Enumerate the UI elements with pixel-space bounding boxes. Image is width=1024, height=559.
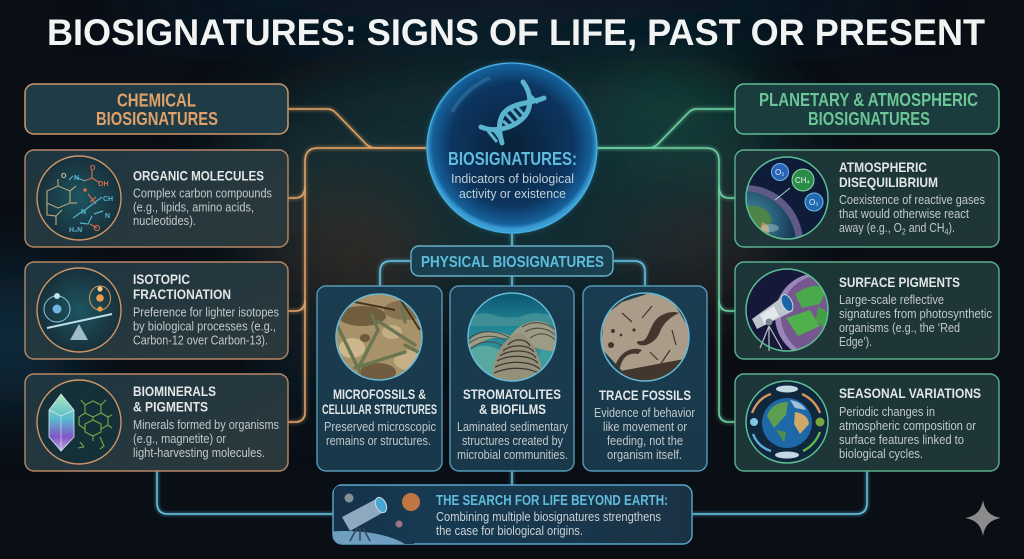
panel: surface pigments bbox=[735, 262, 999, 359]
orb text: Indicators of biological bbox=[451, 172, 574, 186]
panel: physical heading bbox=[411, 246, 613, 276]
panel: stromatolites bbox=[450, 286, 574, 471]
panel: chemical heading bbox=[25, 84, 288, 134]
icon: crystal and pigment molecule bbox=[37, 380, 121, 464]
panel: planetary heading bbox=[735, 84, 999, 134]
central orb bbox=[427, 63, 597, 233]
card text: by biological processes (e.g., bbox=[133, 320, 276, 334]
card heading: & BIOFILMS bbox=[479, 401, 546, 417]
icon: molecule: H₂N bbox=[69, 227, 82, 234]
icon: molecule: N bbox=[81, 209, 86, 216]
icon: molecule: OH bbox=[98, 181, 108, 188]
card heading bbox=[463, 386, 561, 417]
panel: chemical heading: CHEMICAL bbox=[117, 90, 196, 110]
card heading: & PIGMENTS bbox=[133, 398, 208, 414]
card text: Preference for lighter isotopes bbox=[133, 306, 279, 320]
card heading: FRACTIONATION bbox=[133, 286, 231, 302]
icon: earth with seasonal cycle bbox=[746, 381, 828, 463]
card heading: MICROFOSSILS & bbox=[333, 386, 426, 402]
connectors: physical and bottom bbox=[157, 232, 867, 514]
icon: sparkle watermark bbox=[965, 500, 1001, 536]
icon: DNA helix bbox=[481, 82, 544, 143]
card heading: ISOTOPIC bbox=[133, 271, 190, 287]
panel: the search for life beyond earth bbox=[332, 484, 693, 545]
card text: away (e.g., O bbox=[839, 221, 913, 235]
icon: earth with gas molecules bbox=[745, 156, 829, 240]
icon: molecule: N bbox=[105, 213, 110, 220]
card heading: CELLULAR STRUCTURES bbox=[322, 401, 437, 417]
card heading: STROMATOLITES bbox=[463, 386, 561, 402]
card text bbox=[594, 406, 695, 462]
panel: trace fossils bbox=[583, 286, 707, 471]
card text: Laminated sedimentary bbox=[457, 420, 569, 434]
card text: Large-scale reflective bbox=[839, 293, 944, 307]
icon: molecule: CH bbox=[103, 196, 113, 203]
card text: 4 bbox=[945, 226, 949, 236]
icon: layered stromatolite mounds bbox=[468, 293, 558, 382]
card text: Preserved microscopic bbox=[324, 420, 436, 434]
orb heading: BIOSIGNATURES: bbox=[448, 149, 577, 169]
card text: Periodic changes in bbox=[839, 405, 935, 419]
card heading: ATMOSPHERIC bbox=[839, 159, 927, 175]
panel: biominerals and pigments bbox=[25, 374, 288, 471]
card text: Complex carbon compounds bbox=[133, 186, 272, 200]
panel: planetary heading: BIOSIGNATURES bbox=[808, 109, 930, 129]
card text: structures created by bbox=[462, 434, 564, 448]
icon: molecule: O bbox=[61, 173, 67, 180]
card heading: TRACE FOSSILS bbox=[599, 387, 691, 403]
card heading bbox=[133, 271, 231, 302]
callout heading: THE SEARCH FOR LIFE BEYOND EARTH: bbox=[436, 493, 668, 509]
card heading: ORGANIC MOLECULES bbox=[133, 168, 264, 184]
card text: that would otherwise react bbox=[839, 207, 969, 221]
card text bbox=[133, 306, 279, 348]
orb text bbox=[451, 172, 574, 201]
card text bbox=[839, 405, 976, 461]
panel: organic molecules bbox=[25, 150, 288, 247]
panel: isotopic fractionation bbox=[25, 262, 288, 359]
card text: ). bbox=[949, 221, 955, 235]
callout text: Combining multiple biosignatures strengthens bbox=[436, 510, 661, 524]
panel: seasonal variations bbox=[735, 374, 999, 471]
card text: organisms (e.g., the ‘Red bbox=[839, 321, 960, 335]
panel: atmospheric disequilibrium bbox=[734, 149, 1000, 248]
orb text: activity or existence bbox=[459, 187, 566, 201]
card text: 2 bbox=[902, 226, 906, 236]
callout text bbox=[436, 510, 661, 538]
card text: like movement or bbox=[603, 420, 687, 434]
card text: light-harvesting molecules. bbox=[133, 446, 265, 460]
card heading bbox=[322, 386, 437, 417]
panel: physical heading: PHYSICAL BIOSIGNATURES bbox=[421, 254, 604, 271]
card text: Minerals formed by organisms bbox=[133, 418, 279, 432]
card text bbox=[839, 193, 985, 236]
card text: Edge’). bbox=[839, 335, 872, 349]
card text: Carbon-12 over Carbon-13). bbox=[133, 334, 268, 348]
icon: burrow trace in rock bbox=[601, 293, 690, 385]
card text bbox=[133, 186, 272, 228]
card text: remains or structures. bbox=[326, 434, 431, 448]
card text bbox=[839, 293, 992, 349]
connectors: chemical branch bbox=[288, 109, 428, 422]
card text: (e.g., magnetite) or bbox=[133, 432, 226, 446]
card text: microbial communities. bbox=[457, 448, 568, 462]
icon: earth with gas molecules: O₂ bbox=[775, 168, 784, 177]
panel: planetary heading: PLANETARY & ATMOSPHERIC bbox=[759, 90, 978, 110]
card text bbox=[457, 420, 569, 462]
callout text: the case for biological origins. bbox=[436, 524, 583, 538]
icon: microfossil filaments bbox=[336, 294, 428, 381]
icon: telescope on planet horizon bbox=[333, 486, 420, 544]
card text: (e.g., lipids, amino acids, bbox=[133, 200, 254, 214]
card text: feeding, not the bbox=[607, 434, 683, 448]
card text: nucleotides). bbox=[133, 214, 196, 228]
title: BIOSIGNATURES: SIGNS OF LIFE, PAST OR PRESENT bbox=[47, 12, 985, 53]
panel: microfossils bbox=[317, 286, 442, 471]
card heading: DISEQUILIBRIUM bbox=[839, 174, 938, 190]
card text: and CH bbox=[906, 221, 945, 235]
card heading: BIOMINERALS bbox=[133, 383, 216, 399]
card text: biological cycles. bbox=[839, 447, 923, 461]
card text: surface features linked to bbox=[839, 433, 964, 447]
card heading bbox=[133, 383, 216, 414]
card text: atmospheric composition or bbox=[839, 419, 976, 433]
card text bbox=[133, 418, 279, 460]
icon: molecule: N bbox=[74, 175, 79, 182]
icon: molecule bbox=[37, 156, 121, 240]
card heading: SURFACE PIGMENTS bbox=[839, 274, 960, 290]
card text: Coexistence of reactive gases bbox=[839, 193, 985, 207]
card heading: SEASONAL VARIATIONS bbox=[839, 385, 981, 401]
icon: molecule: O bbox=[90, 165, 96, 172]
icon: earth with gas molecules: O₃ bbox=[809, 198, 818, 207]
card text: signatures from photosynthetic bbox=[839, 307, 992, 321]
connectors: planetary branch bbox=[596, 109, 735, 422]
card text: Evidence of behavior bbox=[594, 406, 695, 420]
card text: organism itself. bbox=[607, 448, 682, 462]
icon: telescope and planet bbox=[745, 268, 829, 352]
icon: earth with gas molecules: CH₄ bbox=[795, 176, 810, 185]
card heading bbox=[839, 159, 938, 190]
icon: balance with isotopes bbox=[37, 268, 121, 352]
panel: chemical heading: BIOSIGNATURES bbox=[96, 109, 218, 129]
card text bbox=[324, 420, 436, 448]
